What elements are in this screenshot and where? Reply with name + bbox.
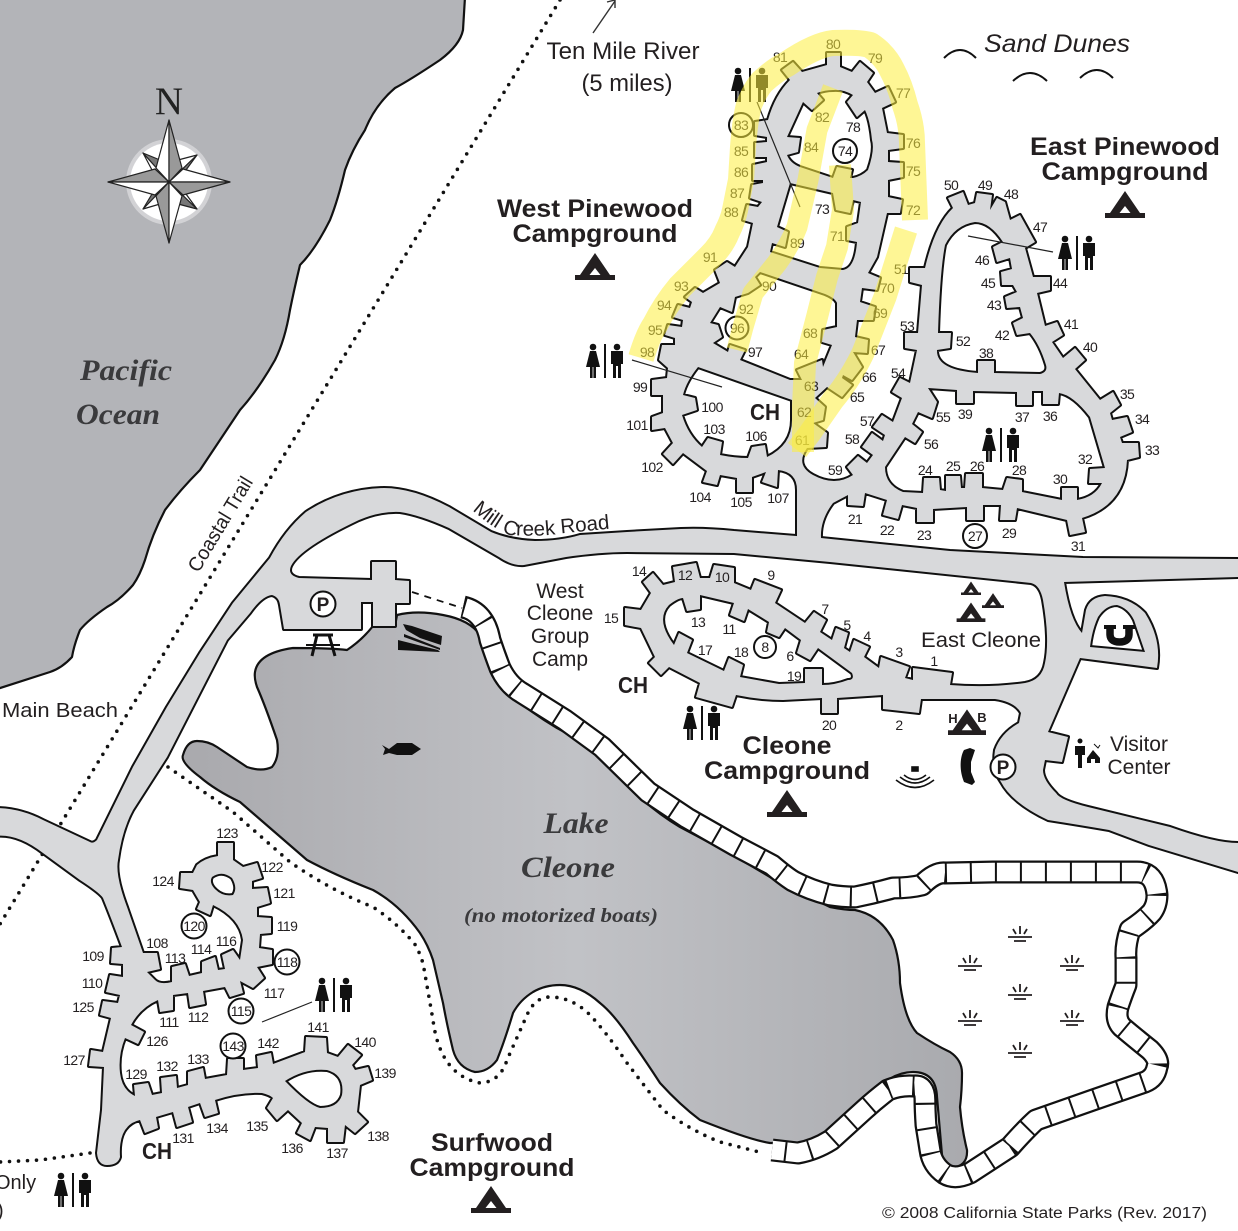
- campground heading: East Pinewood: Campground: [1042, 158, 1208, 186]
- site numbers: Cleone: 8: [761, 639, 769, 655]
- site numbers: West Pinewood: 77: [896, 85, 911, 101]
- site numbers: East Pinewood: 53: [900, 318, 915, 334]
- site numbers: West Pinewood: 72: [906, 202, 921, 218]
- site numbers: West Pinewood: 81: [773, 49, 788, 65]
- site numbers: East Pinewood: 35: [1120, 386, 1135, 402]
- site numbers: Cleone: 4: [863, 628, 871, 644]
- site numbers: West Pinewood: 70: [880, 280, 895, 296]
- comfort station labels: CH: [142, 1138, 172, 1164]
- compass rose: [108, 120, 230, 243]
- label: Main Beach: Main Beach: [2, 699, 118, 722]
- site numbers: West Pinewood: 78: [846, 119, 861, 135]
- site numbers: Surfwood: 109: [82, 948, 105, 964]
- lakeside trail: [168, 767, 763, 1153]
- site numbers: West Pinewood: 88: [724, 204, 739, 220]
- site numbers: Surfwood: 121: [273, 885, 296, 901]
- site numbers: West Pinewood: 73: [815, 201, 830, 217]
- site numbers: East Pinewood: 40: [1083, 339, 1098, 355]
- path for road label: [472, 510, 628, 536]
- site numbers: West Pinewood: 95: [648, 322, 663, 338]
- site numbers: Surfwood: 141: [307, 1019, 330, 1035]
- label: Lake Cleone: [464, 807, 658, 927]
- label: Ten Mile River: (5 miles): [582, 70, 672, 97]
- site numbers: West Pinewood: 62: [797, 404, 812, 420]
- site numbers: East Pinewood: 46: [975, 252, 990, 268]
- label: Ten Mile River: [546, 38, 700, 97]
- site numbers: West Pinewood: 96: [730, 320, 745, 336]
- yellow highlight over West Pinewood loop: [641, 43, 915, 452]
- site numbers: Surfwood: 129: [125, 1066, 148, 1082]
- site numbers: Surfwood: 118: [277, 954, 298, 970]
- site numbers: East Pinewood: 32: [1078, 451, 1093, 467]
- site numbers: West Pinewood: 91: [703, 249, 718, 265]
- site numbers: Surfwood: 122: [261, 859, 284, 875]
- icon: dump station: [1104, 626, 1135, 642]
- copyright: © 2008 California State Parks (Rev. 2017): [882, 1205, 1207, 1222]
- campground heading: Cleone: Cleone: [742, 732, 832, 760]
- site numbers: East Pinewood: 56: [924, 436, 939, 452]
- campground heading: Cleone: [704, 732, 870, 785]
- site numbers: East Pinewood: 23: [917, 527, 932, 543]
- site numbers: Surfwood: 113: [165, 950, 186, 966]
- Pacific Ocean: [0, 0, 465, 689]
- site numbers: East Pinewood: 47: [1033, 219, 1048, 235]
- site numbers: West Pinewood: 79: [868, 50, 883, 66]
- icon: phone: [961, 748, 975, 785]
- dashed path from parking to boardwalk: [412, 592, 462, 608]
- site numbers: Surfwood: 143: [222, 1038, 245, 1054]
- label: Visitor Center: Visitor: [1110, 733, 1168, 756]
- beach trail: [0, 1153, 90, 1162]
- campground heading: Surfwood: Campground: [410, 1154, 574, 1182]
- site numbers: East Pinewood: 49: [978, 177, 993, 193]
- site numbers: Surfwood: 116: [216, 933, 237, 949]
- site numbers: Surfwood: 132: [156, 1058, 179, 1074]
- site numbers: Cleone: 18: [734, 644, 749, 660]
- site numbers: West Pinewood: 65: [850, 389, 865, 405]
- site numbers: Surfwood: 135: [246, 1118, 269, 1134]
- label: Pacific Ocean: [76, 354, 172, 431]
- campground heading: Surfwood: Surfwood: [431, 1129, 553, 1157]
- site numbers: Cleone: 14: [632, 563, 647, 579]
- site numbers: West Pinewood: 61: [795, 432, 810, 448]
- site numbers: West Pinewood: 89: [790, 235, 805, 251]
- site numbers: Cleone: 1: [930, 653, 938, 669]
- site numbers: Surfwood: 108: [146, 935, 169, 951]
- site numbers: Surfwood: 123: [216, 825, 239, 841]
- label: Visitor Center: Center: [1107, 756, 1171, 779]
- label: East Cleone: East Cleone: [921, 629, 1041, 652]
- site numbers: Surfwood: 142: [257, 1035, 280, 1051]
- site circles: [182, 113, 987, 1058]
- campground heading: East Pinewood: [1030, 133, 1220, 186]
- comfort station labels: [142, 399, 780, 1164]
- site numbers: West Pinewood: 107: [767, 490, 790, 506]
- site numbers: West Pinewood: 102: [641, 459, 664, 475]
- site numbers: Surfwood: 136: [281, 1140, 304, 1156]
- icon: wifi: [896, 767, 934, 788]
- campground heading: East Pinewood: East Pinewood: [1030, 133, 1220, 161]
- coastal trail: [0, 0, 560, 924]
- site numbers: East Pinewood: 24: [918, 462, 933, 478]
- site numbers: Surfwood: 131: [172, 1130, 195, 1146]
- site numbers: Surfwood: [63, 825, 397, 1161]
- site numbers: West Pinewood: 76: [906, 135, 921, 151]
- site numbers: East Pinewood: 55: [936, 409, 951, 425]
- site numbers: Surfwood: 139: [374, 1065, 397, 1081]
- site numbers: East Pinewood: 37: [1015, 409, 1030, 425]
- site numbers: Surfwood: 137: [326, 1145, 349, 1161]
- icon: boat launch: [398, 624, 442, 652]
- site numbers: West Pinewood: 64: [794, 346, 809, 362]
- site numbers: West Pinewood: 98: [640, 344, 655, 360]
- marsh symbols: [958, 926, 1084, 1057]
- tent icons: B: [977, 710, 987, 725]
- site numbers: Cleone: 6: [786, 648, 794, 664]
- site numbers: East Pinewood: 28: [1012, 462, 1027, 478]
- site numbers: West Pinewood: 92: [739, 301, 754, 317]
- site numbers: Cleone: 2: [895, 717, 903, 733]
- dotted trails: [0, 0, 763, 1162]
- site numbers: East Pinewood: 33: [1145, 442, 1160, 458]
- site numbers: Cleone: 17: [698, 642, 713, 658]
- site numbers: West Pinewood: 93: [674, 278, 689, 294]
- restroom icons: [54, 68, 1095, 1207]
- site numbers: Surfwood: 115: [231, 1003, 252, 1019]
- site numbers: East Pinewood: 57: [860, 413, 875, 429]
- site numbers: West Pinewood: 68: [803, 325, 818, 341]
- site numbers: West Pinewood: 69: [873, 305, 888, 321]
- site numbers: East Pinewood: 38: [979, 345, 994, 361]
- site numbers: West Pinewood: 97: [748, 344, 763, 360]
- label: cropped beach note: [0, 1172, 36, 1222]
- site numbers: East Pinewood: 31: [1071, 538, 1086, 554]
- site numbers: Cleone: 10: [715, 569, 730, 585]
- site numbers: West Pinewood: 101: [626, 417, 649, 433]
- site numbers: West Pinewood: 86: [734, 164, 749, 180]
- site numbers: Surfwood: 124: [152, 873, 175, 889]
- campground heading: Surfwood: [410, 1129, 574, 1182]
- site numbers: Cleone: 3: [895, 644, 903, 660]
- label: West Cleone Group Camp: Group: [531, 625, 589, 648]
- label: Lake Cleone: Cleone: [521, 851, 615, 884]
- site numbers: West Pinewood: 104: [689, 489, 712, 505]
- site numbers: Cleone: 12: [678, 567, 693, 583]
- campground heading: West Pinewood: [497, 195, 693, 248]
- label: West Cleone Group Camp: Camp: [532, 648, 588, 671]
- site numbers: East Pinewood: 25: [946, 458, 961, 474]
- restroom lines: [262, 102, 1053, 1022]
- site numbers: East Pinewood: 48: [1004, 186, 1019, 202]
- site numbers: Cleone: 15: [604, 610, 619, 626]
- site numbers: Surfwood: 134: [206, 1120, 229, 1136]
- label: Ten Mile River: Ten Mile River: [546, 38, 700, 65]
- site numbers: West Pinewood: 66: [862, 369, 877, 385]
- Lake Cleone: [183, 612, 967, 1168]
- label: West Cleone Group Camp: [527, 580, 593, 671]
- campground heading: Cleone: Campground: [704, 757, 870, 785]
- site numbers: West Pinewood: 99: [633, 379, 648, 395]
- site numbers: Surfwood: 114: [191, 941, 212, 957]
- label: Mill Creek Road: Mill Creek Road: [474, 500, 608, 536]
- site numbers: East Pinewood: [828, 177, 1160, 554]
- site numbers: West Pinewood: 85: [734, 143, 749, 159]
- site numbers: Cleone: 13: [691, 614, 706, 630]
- label: Lake Cleone: Lake: [542, 807, 608, 840]
- site numbers: East Pinewood: 22: [880, 522, 895, 538]
- label: Visitor Center: [1107, 733, 1171, 779]
- site numbers: Surfwood: 117: [264, 985, 285, 1001]
- site numbers: West Pinewood: 80: [826, 36, 841, 52]
- site numbers: Cleone: 19: [787, 668, 802, 684]
- tent icons: H: [948, 711, 958, 726]
- Ten Mile River arrow: [593, 0, 615, 33]
- site numbers: East Pinewood: 27: [968, 528, 983, 544]
- parking icons: P: [997, 758, 1010, 779]
- tent icons: [471, 191, 1145, 1213]
- label: Pacific Ocean: Pacific: [79, 354, 172, 387]
- site numbers: West Pinewood: 63: [804, 378, 819, 394]
- campground heading: West Pinewood: West Pinewood: [497, 195, 693, 223]
- site numbers: Surfwood: 138: [367, 1128, 390, 1144]
- site numbers: East Pinewood: 42: [995, 327, 1010, 343]
- label: Sand Dunes: Sand Dunes: [984, 30, 1130, 58]
- sand dune marks: [944, 50, 1113, 81]
- site numbers: Surfwood: 110: [82, 975, 103, 991]
- campground heading: West Pinewood: Campground: [512, 220, 678, 248]
- site numbers: West Pinewood: 84: [804, 139, 819, 155]
- site numbers: Surfwood: 133: [187, 1051, 210, 1067]
- site numbers: Cleone: 9: [767, 567, 775, 583]
- site numbers: East Pinewood: 29: [1002, 525, 1017, 541]
- site numbers: West Pinewood: [626, 36, 921, 510]
- site numbers: West Pinewood: 74: [838, 143, 853, 159]
- site numbers: East Pinewood: 50: [944, 177, 959, 193]
- site numbers: West Pinewood: 71: [830, 228, 845, 244]
- site numbers: East Pinewood: 54: [891, 365, 906, 381]
- site numbers: West Pinewood: 105: [730, 494, 753, 510]
- site numbers: Cleone: [604, 563, 938, 733]
- site numbers: West Pinewood: 51: [894, 261, 909, 277]
- site numbers: West Pinewood: 83: [734, 117, 749, 133]
- site numbers: West Pinewood: 100: [701, 399, 724, 415]
- site numbers: East Pinewood: 34: [1135, 411, 1150, 427]
- site numbers: Cleone: 5: [843, 617, 851, 633]
- site numbers: West Pinewood: 75: [906, 163, 921, 179]
- site numbers: Cleone: 11: [722, 621, 736, 637]
- site numbers: East Pinewood: 21: [848, 511, 863, 527]
- site numbers: East Pinewood: 58: [845, 431, 860, 447]
- boardwalk trail around lake: [463, 607, 1158, 1177]
- site numbers: West Pinewood: 103: [703, 421, 726, 437]
- parking icons: P: [317, 595, 330, 616]
- parking icons: [310, 592, 1016, 780]
- site numbers: Surfwood: 140: [354, 1034, 377, 1050]
- site numbers: Surfwood: 120: [183, 918, 206, 934]
- label: Coastal Trail: Coastal Trail: [184, 473, 258, 576]
- site numbers: West Pinewood: 82: [815, 109, 830, 125]
- site numbers: East Pinewood: 44: [1053, 275, 1068, 291]
- site numbers: East Pinewood: 59: [828, 462, 843, 478]
- icon: visitor center: [1075, 738, 1100, 768]
- site numbers: East Pinewood: 41: [1064, 316, 1079, 332]
- site numbers: West Pinewood: 67: [871, 342, 886, 358]
- site numbers: East Pinewood: 43: [987, 297, 1002, 313]
- site numbers: East Pinewood: 30: [1053, 471, 1068, 487]
- label: West Cleone Group Camp: West: [536, 580, 584, 603]
- site numbers: Surfwood: 126: [146, 1033, 169, 1049]
- label: Pacific Ocean: Ocean: [76, 398, 160, 431]
- site numbers: Surfwood: 125: [72, 999, 95, 1015]
- site numbers: East Pinewood: 45: [981, 275, 996, 291]
- site numbers: Surfwood: 112: [188, 1009, 209, 1025]
- icon: picnic table: [306, 635, 340, 656]
- site numbers: Surfwood: 119: [277, 918, 298, 934]
- site numbers: West Pinewood: 94: [657, 297, 672, 313]
- comfort station labels: CH: [750, 399, 780, 425]
- site numbers: East Pinewood: 36: [1043, 408, 1058, 424]
- site numbers: West Pinewood: 90: [762, 278, 777, 294]
- site numbers: Surfwood: 127: [63, 1052, 86, 1068]
- site numbers: Surfwood: 111: [159, 1014, 180, 1030]
- icon: fish: [382, 743, 421, 755]
- site numbers: Cleone: 7: [821, 601, 829, 617]
- comfort station labels: CH: [618, 672, 648, 698]
- site numbers: East Pinewood: 52: [956, 333, 971, 349]
- site numbers: East Pinewood: 39: [958, 406, 973, 422]
- site numbers: West Pinewood: 106: [745, 428, 768, 444]
- north label: N: [155, 80, 183, 123]
- site numbers: East Pinewood: 26: [970, 458, 985, 474]
- site numbers: Cleone: 20: [822, 717, 837, 733]
- label: Lake Cleone: (no motorized boats): [464, 905, 658, 927]
- site numbers: West Pinewood: 87: [730, 185, 745, 201]
- label: West Cleone Group Camp: Cleone: [527, 602, 593, 625]
